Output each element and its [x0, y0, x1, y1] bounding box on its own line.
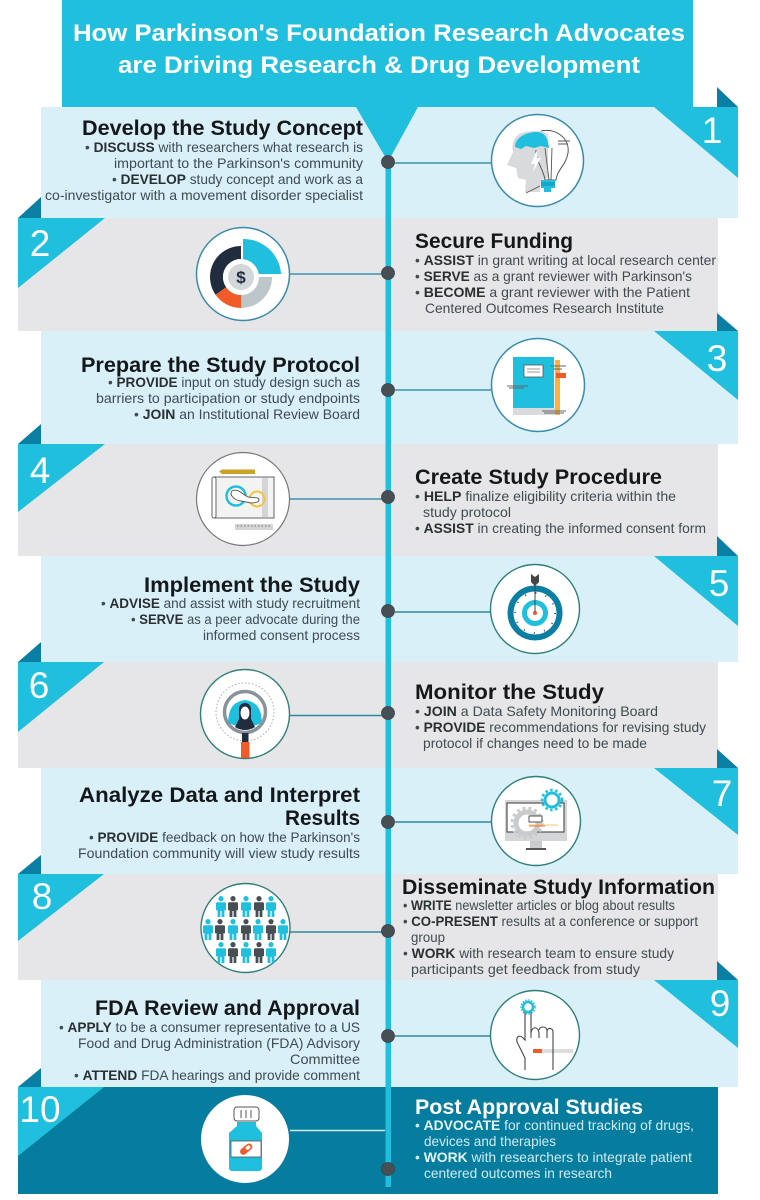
text block: important to the Parkinson's community: [114, 156, 363, 171]
panel: title header: [62, 0, 693, 107]
connector: [290, 498, 388, 500]
heading: Post Approval Studies: [415, 1096, 643, 1119]
text block: protocol if changes need to be made: [423, 736, 647, 751]
number 9: 9: [710, 983, 730, 1024]
panel: step 8 disseminate study information: [18, 855, 718, 980]
heading: Monitor the Study: [415, 681, 604, 704]
number 10: 10: [19, 1089, 61, 1130]
heading: [79, 784, 360, 830]
text block: • BECOME a grant reviewer with the Patient: [415, 285, 690, 300]
text block: Foundation community will view study results: [78, 846, 360, 861]
icon: magnifier over person: [200, 670, 290, 758]
text block: group: [411, 930, 445, 945]
text block: • ADVOCATE for continued tracking of drugs,: [415, 1118, 694, 1133]
connector: [395, 1035, 491, 1037]
text block: [78, 830, 360, 861]
text block: informed consent process: [203, 628, 360, 643]
panel: step 3 prepare the study protocol: [41, 313, 738, 444]
heading: Implement the Study: [144, 574, 360, 597]
icon: medicine bottle: [201, 1095, 289, 1183]
icon: group of people: [201, 884, 290, 972]
text block: • ASSIST in creating the informed consent form: [415, 521, 706, 536]
text block: • PROVIDE recommendations for revising study: [415, 720, 706, 735]
title: are Driving Research & Drug Development: [118, 52, 640, 79]
heading: Prepare the Study Protocol: [81, 354, 360, 377]
number 5: 5: [709, 563, 729, 604]
text block: Committee: [290, 1052, 360, 1067]
connector: [395, 611, 491, 613]
number 3: 3: [707, 338, 727, 379]
text block: [415, 704, 706, 751]
connector: [290, 273, 388, 275]
icon: target with dart: [490, 564, 580, 654]
connector: [395, 389, 491, 391]
text block: centered outcomes in research: [424, 1166, 612, 1181]
icon: donut chart with dollar: $: [236, 268, 246, 287]
icon: hand pressing gear button: [490, 990, 580, 1080]
panel: step 5 implement the study: [41, 536, 738, 662]
number 4: 4: [30, 450, 50, 491]
text block: [415, 489, 706, 536]
panel: step 6 monitor the study: [18, 642, 718, 768]
text block: • DISCUSS with researchers what research is: [85, 140, 363, 155]
text block: [101, 596, 360, 643]
connector: [395, 821, 491, 823]
number 1: 1: [702, 110, 722, 151]
icon: blueprint with gears: [196, 452, 290, 546]
text block: [45, 140, 363, 203]
timeline dots: [382, 156, 394, 1176]
heading: Results: [285, 807, 360, 830]
text block: [415, 1118, 694, 1181]
text block: • WRITE newsletter articles or blog about results: [403, 898, 675, 913]
title: How Parkinson's Foundation Research Advocates: [73, 20, 685, 47]
text block: [59, 1020, 360, 1083]
text block: • PROVIDE feedback on how the Parkinson's: [89, 830, 360, 845]
panel: step 9 FDA review and approval: [41, 961, 738, 1087]
timeline spine: [382, 156, 394, 1187]
icon: computer monitor with gears: [492, 776, 580, 866]
connector: [290, 1130, 385, 1132]
panel: step 4 create study procedure: [18, 424, 718, 556]
heading: FDA Review and Approval: [95, 997, 360, 1020]
icon: head with light bulb: [492, 114, 584, 206]
panel: step 10 post approval studies: [18, 1068, 718, 1194]
heading: Disseminate Study Information: [402, 876, 715, 899]
connector: [290, 714, 388, 716]
icon: notebook: [492, 338, 584, 432]
text block: co-investigator with a movement disorder specialist: [45, 188, 363, 203]
text block: • HELP finalize eligibility criteria within the: [415, 489, 676, 504]
text block: • ATTEND FDA hearings and provide comment: [74, 1068, 360, 1083]
text block: • WORK with researchers to integrate patient: [415, 1150, 692, 1165]
text block: • ADVISE and assist with study recruitment: [101, 596, 360, 611]
number 7: 7: [712, 773, 732, 814]
connector: [391, 162, 491, 164]
heading: Create Study Procedure: [415, 466, 662, 489]
text block: Food and Drug Administration (FDA) Advisory: [78, 1036, 360, 1051]
number 2: 2: [30, 223, 50, 264]
connector: [290, 931, 388, 933]
text block: • SERVE as a grant reviewer with Parkinson's: [415, 269, 692, 284]
text block: [403, 898, 698, 977]
text block: • WORK with research team to ensure study: [403, 946, 674, 961]
icon: donut chart with dollar: [196, 228, 290, 320]
heading: Secure Funding: [415, 230, 573, 253]
heading: Develop the Study Concept: [82, 117, 363, 140]
heading: Analyze Data and Interpret: [79, 784, 360, 807]
title: [73, 20, 685, 79]
text block: devices and therapies: [424, 1134, 556, 1149]
panel: step 2 secure funding: [18, 197, 718, 331]
text block: [415, 253, 716, 316]
text block: • DEVELOP study concept and work as a: [112, 172, 363, 187]
text block: barriers to participation or study endpoints: [96, 391, 360, 406]
text block: • SERVE as a peer advocate during the: [131, 612, 360, 627]
number 6: 6: [29, 665, 49, 706]
text block: Centered Outcomes Research Institute: [425, 301, 664, 316]
panel: step 1 develop the study concept: [41, 87, 738, 218]
text block: • JOIN a Data Safety Monitoring Board: [415, 704, 658, 719]
text block: study protocol: [423, 505, 511, 520]
text block: • ASSIST in grant writing at local research center: [415, 253, 716, 268]
text block: participants get feedback from study: [411, 962, 640, 977]
text block: • JOIN an Institutional Review Board: [134, 407, 360, 422]
text block: • PROVIDE input on study design such as: [108, 375, 360, 390]
funnel pointer from header: [356, 107, 418, 160]
number 8: 8: [32, 876, 52, 917]
text block: [96, 375, 360, 422]
text block: • CO-PRESENT results at a conference or support: [403, 914, 698, 929]
panel: step 7 analyze data and interpret results: [41, 749, 738, 874]
text block: • APPLY to be a consumer representative to a US: [59, 1020, 360, 1035]
